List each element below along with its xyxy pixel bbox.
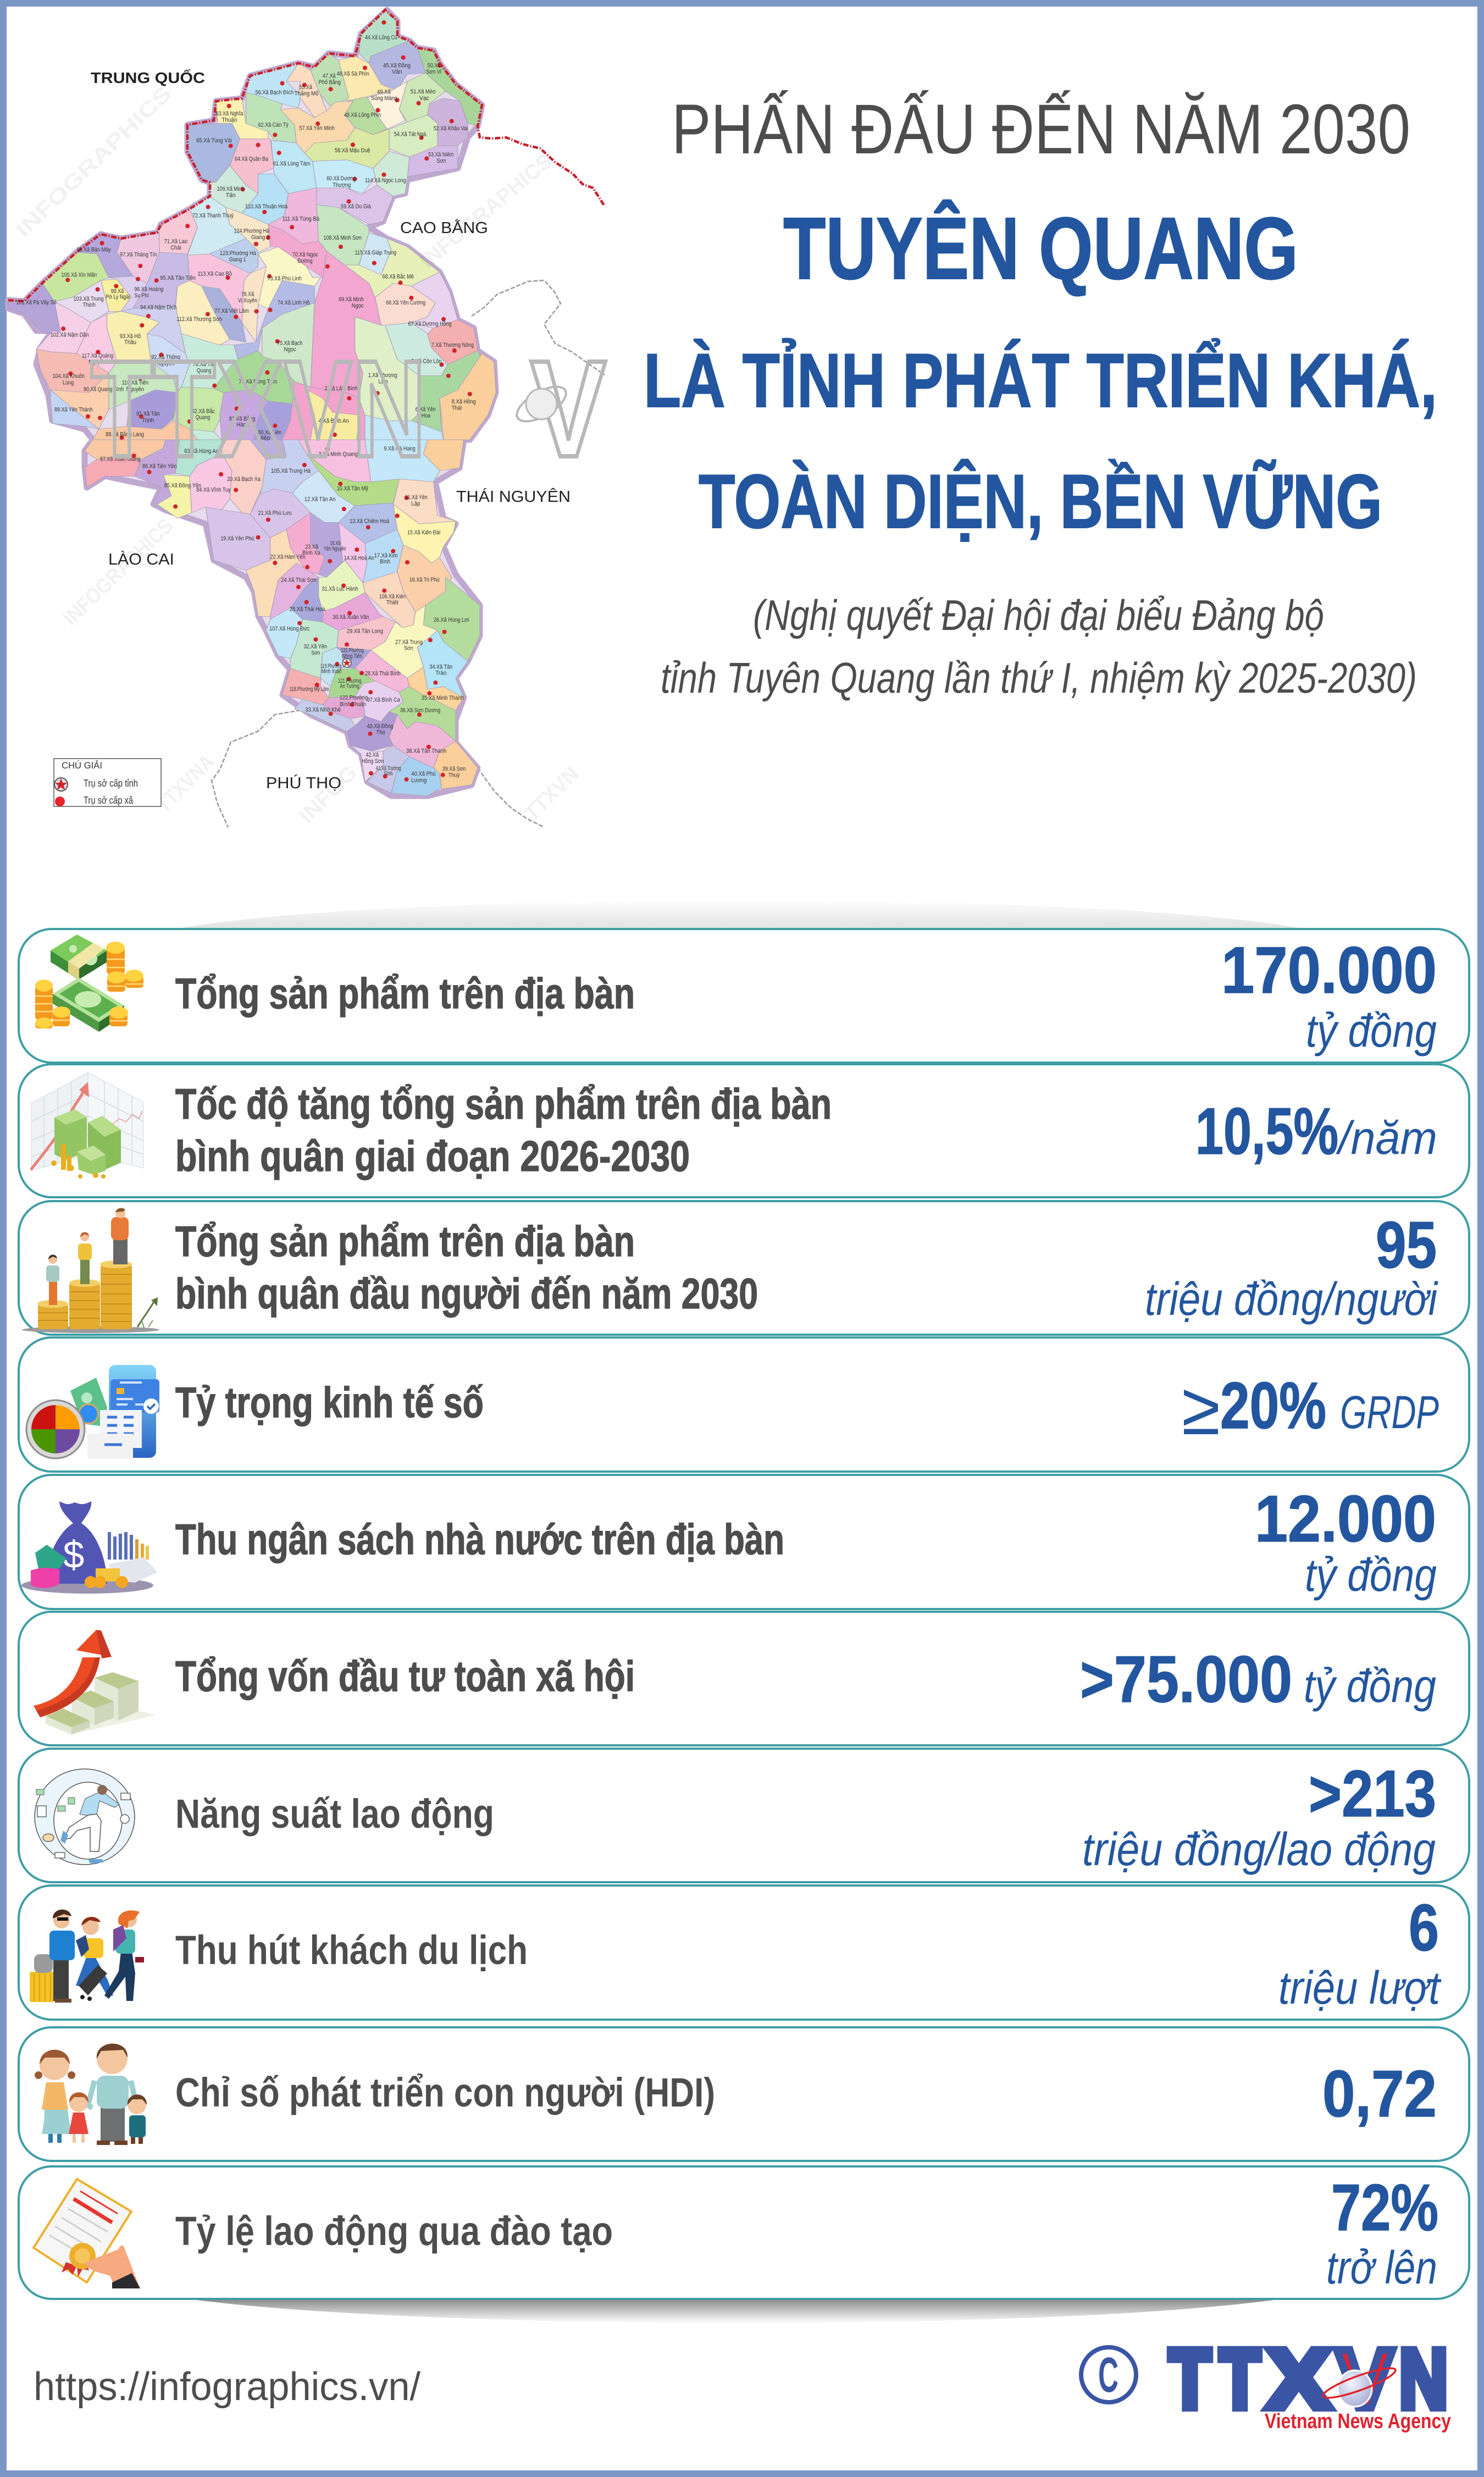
commune name labels, north: Hành bbox=[237, 421, 249, 428]
commune head-office dots, south bbox=[132, 447, 447, 782]
commune name labels, north: 70.Xã Ngọc bbox=[292, 251, 318, 258]
commune name labels, north: 81.Xã Bằng bbox=[229, 415, 255, 422]
commune name labels, north: Nguyên bbox=[157, 360, 174, 367]
commune name labels, south: An Tường bbox=[340, 683, 359, 689]
commune name labels, north: Sủng Máng bbox=[371, 95, 397, 102]
commune name labels, north: 68.Xã Bắc Mê bbox=[383, 273, 414, 280]
commune name labels, north: 48.Xã Lũng Phìn bbox=[344, 112, 381, 118]
icon: pie chart and phone bbox=[26, 1365, 159, 1459]
value: trở lên bbox=[1326, 2242, 1437, 2293]
watermarks: INFOG bbox=[295, 761, 362, 828]
commune name labels, north: 60.Xã Dương bbox=[326, 175, 356, 181]
commune name labels, north: Nguyên bbox=[126, 386, 144, 392]
label bbox=[175, 1080, 832, 1180]
commune name labels, south: 41.Xã Trường bbox=[376, 765, 401, 771]
commune name labels, south: 35.Xã Minh Thanh bbox=[422, 694, 464, 701]
commune name labels, north: Phố Bằng bbox=[319, 79, 341, 85]
commune name labels, north: Ngọc bbox=[352, 302, 364, 309]
commune name labels, north: Vị Xuyên bbox=[238, 297, 257, 303]
commune name labels, north bbox=[16, 34, 476, 441]
label: Thu ngân sách nhà nước trên địa bàn bbox=[175, 1515, 784, 1563]
commune name labels, north: Thái bbox=[452, 405, 462, 411]
logo wordmark: T bbox=[1220, 2332, 1260, 2426]
logo wordmark: X bbox=[1267, 2332, 1331, 2426]
commune name labels, north: Đường bbox=[297, 257, 313, 264]
commune name labels, south: 27.Xã Trung bbox=[395, 639, 423, 645]
commune name labels, north: 124.Phường Hà bbox=[234, 228, 270, 234]
commune polygons, north half bbox=[8, 10, 496, 440]
commune name labels, north: Hiệp bbox=[258, 434, 270, 441]
commune name labels, south: 105.Xã Trung Hà bbox=[271, 468, 311, 474]
commune name labels, north: 102.Xã Nậm Dần bbox=[51, 331, 88, 338]
TTXVN map watermark: V bbox=[530, 332, 606, 485]
commune name labels, south: 11.Xã Yên bbox=[405, 494, 428, 501]
commune name labels, south: 19.Xã Yên Phú bbox=[220, 535, 254, 542]
neighbouring region names: THÁI NGUYÊN bbox=[456, 488, 571, 506]
row 9: HDI bbox=[19, 2027, 1469, 2161]
commune name labels, north: 50.Xã bbox=[428, 62, 441, 69]
value: triệu lượt bbox=[1278, 1962, 1442, 2014]
commune name labels, north: 73.Xã Phú Linh bbox=[267, 275, 302, 282]
commune name labels, north: 98.Xã Bản Máy bbox=[76, 246, 111, 253]
commune name labels, north: 116.Xã Tiến bbox=[122, 379, 148, 386]
commune name labels, north: 58.Xã Mậu Duệ bbox=[335, 147, 370, 153]
row 1: GRDP bbox=[19, 929, 1469, 1063]
label: Tỷ lệ lao động qua đào tạo bbox=[175, 2208, 613, 2254]
logo globe and ring bbox=[1321, 2363, 1398, 2407]
commune name labels, south: 83.Xã Hùng An bbox=[184, 447, 219, 454]
icon: certificate and hand bbox=[34, 2179, 140, 2288]
shadow above stat panel bbox=[175, 900, 1306, 929]
commune name labels, north: 99.Xã bbox=[111, 287, 124, 295]
value bbox=[1145, 1208, 1438, 1325]
value: 170.000 bbox=[1221, 933, 1437, 1007]
commune name labels, north: Lùng bbox=[63, 379, 74, 386]
commune name labels, north: 82.Xã Bắc bbox=[192, 408, 215, 414]
commune name labels, south: Sinh bbox=[384, 770, 393, 777]
value bbox=[1278, 1891, 1442, 2014]
icon: red arrow over money bbox=[34, 1630, 156, 1734]
label: bình quân đầu người đến năm 2030 bbox=[175, 1269, 758, 1318]
commune name labels, north: 51.Xã Mèo bbox=[411, 88, 435, 95]
commune name labels, south: 24.Xã Thái Sơn bbox=[281, 577, 317, 583]
logo wordmark: T bbox=[1169, 2332, 1211, 2426]
commune polygons, south half bbox=[85, 440, 480, 796]
value: 6 bbox=[1409, 1891, 1439, 1965]
province outer border bbox=[8, 10, 496, 796]
commune name labels, south: 37.Xã Bình Ca bbox=[367, 696, 400, 703]
row 5: budget revenue bbox=[19, 1475, 1469, 1609]
commune name labels, north: 103.Xã Trung bbox=[74, 295, 104, 302]
icon: provincial head-office star on map bbox=[342, 659, 351, 667]
commune name labels, north: 4.Xã Bình An bbox=[319, 417, 349, 424]
commune name labels, south: 29.Xã Tân Long bbox=[347, 628, 383, 634]
commune name labels, south: 87.Xã Xuân Giang bbox=[100, 456, 140, 462]
commune name labels, south: 15.Xã Kiên Đài bbox=[407, 529, 440, 535]
commune name labels, south: Bình bbox=[380, 558, 390, 565]
commune name labels, south: Yên Nguyên bbox=[324, 545, 346, 552]
commune name labels, north: Thầu bbox=[124, 339, 136, 345]
commune name labels, north: 104.Xã Khuôn bbox=[52, 373, 85, 379]
map: Tuyên Quang communes bbox=[8, 10, 606, 828]
commune name labels, south: 32.Xã Yên bbox=[303, 643, 327, 650]
commune name labels, north: 6.Xã Yên bbox=[416, 406, 435, 412]
icon: growth chart and money stacks bbox=[31, 1072, 143, 1179]
commune name labels, north: 90.Xã Quang Bình bbox=[84, 386, 124, 392]
row 2: growth bbox=[19, 1064, 1469, 1197]
commune name labels, north: 115.Xã Giáp Trung bbox=[355, 249, 396, 256]
commune name labels, south: Sơn bbox=[311, 649, 320, 656]
commune name labels, north: 80.Xã Liên bbox=[258, 429, 281, 435]
commune name labels, south: Hồng Sơn bbox=[362, 758, 384, 765]
commune name labels, north: 46.Xã Sà Phìn bbox=[337, 70, 369, 77]
commune name labels, north: 57.Xã Yên Minh bbox=[299, 125, 335, 131]
value bbox=[1082, 1757, 1436, 1875]
commune name labels, north: 113.Xã Cao Bồ bbox=[198, 270, 232, 277]
commune name labels, north: 101.Xã Pà Vầy Sủ bbox=[16, 299, 57, 306]
commune name labels, south: Nông Tiến bbox=[342, 653, 362, 659]
commune name labels, south: Lập bbox=[411, 500, 420, 507]
label bbox=[175, 1217, 758, 1318]
icon: running man in ring bbox=[35, 1769, 135, 1865]
value bbox=[1326, 2171, 1438, 2293]
commune name labels, north: 96.Xã Hoàng bbox=[134, 286, 163, 292]
commune name labels, north: 93.Xã Hồ bbox=[120, 333, 141, 339]
row 7: labour productivity bbox=[19, 1749, 1469, 1882]
watermarks bbox=[12, 82, 583, 828]
value: tỷ đồng bbox=[1305, 1549, 1437, 1601]
label: Thu hút khách du lịch bbox=[175, 1927, 528, 1973]
commune name labels, north: 91.Xã Tân bbox=[136, 410, 160, 417]
commune name labels, north: 74.Xã Linh Hồ bbox=[278, 299, 309, 306]
title main line: TUYÊN QUANG bbox=[783, 199, 1298, 297]
commune name labels, south: 107.Xã Hùng Đức bbox=[269, 625, 310, 632]
commune name labels, north: 61.Xã Lùng Tám bbox=[273, 160, 310, 167]
commune name labels, north: 49.Xã bbox=[377, 89, 391, 95]
value: 10,5% bbox=[1195, 1094, 1338, 1168]
label: Tổng vốn đầu tư toàn xã hội bbox=[175, 1652, 635, 1700]
commune name labels, south: 28.Xã Thái Bình bbox=[365, 670, 401, 677]
commune name labels, north: Quang bbox=[196, 414, 210, 421]
copyright symbol: C bbox=[1098, 2348, 1118, 2403]
value: 0,72 bbox=[1322, 2057, 1437, 2131]
commune name labels, north: 92.Xã Thông bbox=[151, 353, 180, 360]
value: tỷ đồng bbox=[1306, 1005, 1437, 1057]
commune name labels, north: 110.Xã Thuận Hoà bbox=[245, 203, 288, 210]
commune name labels, north: 63.Xã Nghĩa bbox=[216, 110, 243, 117]
label: Tỷ trọng kinh tế số bbox=[175, 1378, 484, 1427]
commune name labels, south: 122.Phường bbox=[340, 694, 368, 701]
icon: travellers with luggage bbox=[30, 1910, 144, 2003]
commune name labels, south: 86.Xã Tiên Yên bbox=[142, 463, 176, 469]
commune name labels, north: Sơn bbox=[437, 157, 446, 164]
icon: family bbox=[35, 2043, 147, 2145]
commune name labels, north: 8.Xã Hồng bbox=[452, 398, 476, 405]
commune name labels, north: 71.Xã Lao bbox=[164, 238, 187, 245]
commune name labels, north: 88.Xã Bằng Lang bbox=[106, 431, 144, 438]
neighbouring region names: PHÚ THỌ bbox=[266, 774, 341, 792]
commune name labels, south bbox=[100, 445, 469, 783]
map legend: Trụ sở cấp xã bbox=[84, 795, 134, 806]
commune name labels, north: 123.Phường Hà bbox=[220, 250, 256, 256]
commune name labels, north: 79.Xã Đồng Tâm bbox=[239, 378, 277, 385]
neighbouring region names: CAO BẰNG bbox=[400, 218, 488, 237]
commune name labels, north: 52.Xã Khâu Vai bbox=[434, 125, 468, 132]
value bbox=[1182, 1367, 1439, 1450]
commune name labels, north: Sơn Vĩ bbox=[427, 68, 442, 75]
commune name labels, north: 64.Xã Quản Bạ bbox=[235, 156, 268, 162]
neighbouring region names bbox=[91, 69, 571, 792]
commune name labels, south: 16.Xã Tri Phú bbox=[409, 576, 440, 583]
value: triệu đồng/lao động bbox=[1082, 1823, 1436, 1875]
commune name labels, south: 12.Xã Tân An bbox=[304, 496, 335, 502]
commune name labels, north: 111.Xã Tùng Bá bbox=[283, 215, 320, 222]
logo wordmark bbox=[1169, 2332, 1448, 2426]
commune name labels, south: 120.Phường bbox=[341, 647, 364, 654]
watermarks: TTXVNA bbox=[152, 750, 219, 817]
commune name labels, north: 56.Xã Bạch Đích bbox=[255, 89, 294, 96]
commune name labels, north: 65.Xã Tùng Vài bbox=[196, 137, 232, 144]
commune name labels, north: Thượng bbox=[333, 181, 351, 188]
commune name labels, south: 40.Xã Phú bbox=[411, 771, 435, 777]
source note line one: (Nghị quyết Đại hội đại biểu Đảng bộ bbox=[753, 591, 1324, 639]
commune name labels, south: 85.Xã Đồng Yên bbox=[164, 482, 201, 489]
commune name labels, south: 30.Xã Xuân Vân bbox=[333, 613, 369, 620]
commune name labels, south: Trào bbox=[435, 670, 446, 676]
row 3: per capita bbox=[19, 1201, 1469, 1335]
watermarks: INFOGRAPHICS bbox=[59, 515, 178, 630]
map legend bbox=[54, 759, 161, 806]
commune name labels, south: 34.Xã Tân bbox=[429, 664, 452, 670]
commune name labels, north: 77.Xã Việt Lâm bbox=[214, 307, 249, 314]
commune name labels, south: 119.Phường bbox=[320, 662, 341, 669]
commune name labels, south: 10.Xã Tân Mỹ bbox=[337, 485, 368, 491]
commune name labels, south: 17.Xã Kim bbox=[374, 552, 397, 559]
shadow below stat panel bbox=[196, 2300, 1273, 2323]
commune name labels, north: 94.Xã Nậm Dịch bbox=[140, 304, 176, 311]
commune name labels, south: Thuỷ bbox=[448, 772, 460, 778]
map legend: Trụ sở cấp tỉnh bbox=[84, 778, 138, 789]
commune name labels, south: 106.Xã Kiên bbox=[379, 593, 406, 600]
logo wordmark: N bbox=[1399, 2332, 1448, 2426]
commune name labels, north: Tân bbox=[226, 192, 235, 198]
commune name labels, north: Hoa bbox=[422, 412, 430, 419]
commune name labels, north: 53.Xã Niêm bbox=[428, 151, 453, 158]
commune name labels, south: 20.Xã Bạch Xa bbox=[227, 476, 261, 482]
commune name labels, south: 18.Xã bbox=[330, 540, 341, 546]
value: GRDP bbox=[1340, 1386, 1439, 1438]
row 10: trained labour bbox=[19, 2166, 1469, 2299]
icon: money bag bbox=[21, 1501, 158, 1594]
commune name labels, north: 114.Xã Ngọc Long bbox=[365, 177, 406, 184]
commune name labels, south: 23.Xã bbox=[305, 543, 318, 550]
commune name labels, north: Thuận bbox=[222, 117, 237, 123]
commune name labels, north: 76.Xã bbox=[241, 291, 254, 297]
label: bình quân giai đoạn 2026-2030 bbox=[175, 1132, 690, 1180]
commune name labels, north: 100.Xã Xín Mần bbox=[62, 272, 97, 278]
commune name labels, south: 118.Phường Mỹ Lâm bbox=[290, 685, 329, 693]
label: Tổng sản phẩm trên địa bàn bbox=[175, 1217, 635, 1265]
commune name labels, north: 95.Xã Tân Tiến bbox=[160, 274, 196, 281]
logo wordmark: V bbox=[1336, 2332, 1393, 2426]
commune name labels, south: 42.Xã bbox=[366, 751, 379, 758]
commune name labels, north: 66.Xã Yên Cường bbox=[386, 299, 425, 306]
commune head-office dots, north bbox=[61, 20, 472, 440]
commune name labels, north: 55.Xã bbox=[299, 84, 312, 91]
value: 95 bbox=[1376, 1208, 1437, 1282]
label: Chỉ số phát triển con người (HDI) bbox=[175, 2070, 715, 2115]
commune name labels, north: Ngọc bbox=[284, 346, 296, 352]
icon: people on coin stacks bbox=[22, 1208, 159, 1333]
commune name labels, north: 59.Xã Du Già bbox=[341, 203, 371, 210]
commune name labels, north: Quang bbox=[197, 367, 211, 374]
value: ≥ bbox=[1182, 1367, 1220, 1450]
commune name labels, south: 21.Xã Phù Lưu bbox=[258, 510, 291, 516]
commune name labels, north: Pờ Ly Ngài bbox=[106, 294, 130, 300]
commune name labels, north: 109.Xã Minh bbox=[217, 185, 245, 192]
neighbouring region names: TRUNG QUỐC bbox=[91, 69, 205, 86]
commune name labels, north: 108.Xã Minh Sơn bbox=[323, 235, 362, 241]
commune name labels, south: Lương bbox=[411, 777, 427, 783]
commune name labels, north: Su Phì bbox=[134, 292, 149, 298]
commune name labels, south: 38.Xã Tân Thanh bbox=[406, 748, 446, 754]
value bbox=[1221, 933, 1437, 1057]
commune name labels, north: 5.Xã Côn Lôn bbox=[411, 358, 441, 364]
commune name labels, south: 9.Xã Nà Hang bbox=[384, 445, 416, 452]
commune name labels, north: 89.Xã Yên Thành bbox=[54, 406, 93, 413]
commune name labels, north: 45.Xã Đồng bbox=[383, 62, 411, 69]
value: >75.000 bbox=[1080, 1643, 1292, 1716]
icon: money bag: $ bbox=[63, 1533, 84, 1576]
title block bbox=[644, 90, 1437, 702]
commune name labels, north: Giang 1 bbox=[229, 256, 246, 263]
red international border, dashed bbox=[8, 10, 605, 301]
commune name labels, north: Chải bbox=[170, 244, 181, 251]
commune name labels, north: 67.Xã Dương Hồng bbox=[408, 320, 452, 327]
commune name labels, north: 78.Xã Tân bbox=[193, 361, 216, 367]
commune name labels, north: 97.Xã Thàng Tín bbox=[120, 251, 157, 258]
value: triệu đồng/người bbox=[1145, 1273, 1438, 1325]
commune name labels, south: Sơn bbox=[404, 645, 413, 651]
commune name labels, south: 13.Xã Chiêm Hoá bbox=[350, 518, 389, 524]
neighbouring region names: LÀO CAI bbox=[108, 550, 174, 568]
commune name labels, south: 43.Xã Đồng bbox=[367, 723, 393, 729]
commune name labels, south: 3.Xã Minh Quang bbox=[319, 451, 358, 457]
commune name labels, north: 54.Xã Tát Ngà bbox=[394, 131, 427, 137]
value: 72% bbox=[1331, 2171, 1438, 2244]
commune name labels, north: Lâm bbox=[378, 378, 388, 385]
commune name labels, north: 69.Xã Minh bbox=[339, 296, 364, 302]
TTXVN map watermark: TTXVN bbox=[91, 332, 426, 485]
row 4: digital economy bbox=[19, 1337, 1469, 1472]
commune name labels, north: 44.Xã Lũng Cú bbox=[365, 34, 397, 41]
label: Tổng sản phẩm trên địa bàn bbox=[175, 969, 635, 1018]
commune name labels, north: Văn bbox=[392, 68, 402, 75]
commune name labels, south: 22.Xã Hàm Yên bbox=[270, 554, 305, 560]
commune name labels, north: 7.Xã Thượng Nông bbox=[431, 341, 474, 349]
commune name labels, south: Thọ bbox=[376, 729, 385, 736]
value: /năm bbox=[1336, 1112, 1437, 1164]
panel: stat rows bbox=[19, 929, 1469, 2299]
commune name labels, south: 31.Xã Lục Hành bbox=[322, 585, 358, 592]
commune name labels, south: 26.Xã Hùng Lợi bbox=[434, 616, 469, 623]
commune name labels, south: Bình Xa bbox=[302, 549, 320, 556]
label: Tốc độ tăng tổng sản phẩm trên địa bàn bbox=[175, 1080, 832, 1128]
commune name labels, north: Vạc bbox=[419, 95, 429, 102]
neighbouring-province boundary lines bbox=[212, 280, 605, 827]
commune name labels, north: 47.Xã bbox=[323, 73, 336, 79]
commune name labels, north: 2.Xã Lâm Bình bbox=[325, 385, 358, 392]
commune name labels, north: Trịnh bbox=[142, 417, 154, 423]
commune name labels, north: 72.Xã Thanh Thuỷ bbox=[192, 212, 234, 219]
logo tagline: Vietnam News Agency bbox=[1265, 2410, 1451, 2433]
value bbox=[1080, 1643, 1436, 1716]
commune name labels, south: Bình Thuận bbox=[340, 701, 366, 707]
commune name labels, north: 62.Xã Cán Tỷ bbox=[258, 121, 289, 128]
logo: TTXVN Vietnam News Agency bbox=[1169, 2332, 1451, 2433]
commune name labels, south: 25.Xã Thái Hoà bbox=[290, 606, 325, 612]
commune name labels, north: 1.Xã Thượng bbox=[368, 372, 397, 379]
value: >213 bbox=[1309, 1757, 1436, 1831]
watermarks: INFOGRAPHICS bbox=[416, 150, 557, 273]
value: tỷ đồng bbox=[1304, 1660, 1436, 1712]
commune name labels, south: Minh Xuân bbox=[322, 668, 341, 674]
label: Năng suất lao động bbox=[175, 1791, 494, 1837]
commune name labels, north: Giang 2 bbox=[251, 234, 269, 241]
copyright symbol bbox=[1081, 2347, 1136, 2403]
commune name labels, south: 36.Xã Sơn Dương bbox=[400, 707, 440, 714]
map legend: CHÚ GIẢI bbox=[62, 760, 102, 771]
commune name labels, south: 14.Xã Hoà An bbox=[344, 555, 374, 561]
commune name labels, north: 117.Xã Quảng bbox=[82, 352, 113, 359]
row 6: investment bbox=[19, 1612, 1469, 1745]
commune name labels, south: 33.Xã Nhữ Khê bbox=[305, 706, 341, 713]
commune name labels, north: Nguyên bbox=[88, 358, 106, 365]
value: 12.000 bbox=[1255, 1482, 1436, 1556]
icon: money and coins bbox=[35, 935, 143, 1032]
commune name labels, north: 75.Xã Bạch bbox=[277, 340, 302, 346]
commune name labels, south: Thiết bbox=[386, 599, 398, 606]
watermarks: TTXVN bbox=[520, 762, 583, 825]
watermarks: INFOGRAPHICS bbox=[12, 82, 176, 242]
value bbox=[1255, 1482, 1437, 1601]
commune name labels, north: Thịnh bbox=[82, 301, 96, 308]
commune name labels, south: 84.Xã Vĩnh Tuy bbox=[196, 486, 231, 493]
footer url: https://infographics.vn/ bbox=[34, 2365, 420, 2409]
commune name labels, north: 112.Xã Thượng Sơn bbox=[176, 316, 222, 323]
commune name labels, north: Thắng Mố bbox=[295, 90, 319, 97]
commune name labels, south: 121.Phường bbox=[338, 677, 361, 684]
commune name labels, south: 39.Xã Sơn bbox=[442, 765, 466, 772]
row 8: tourism bbox=[19, 1886, 1469, 2020]
value: 20% bbox=[1220, 1369, 1326, 1442]
